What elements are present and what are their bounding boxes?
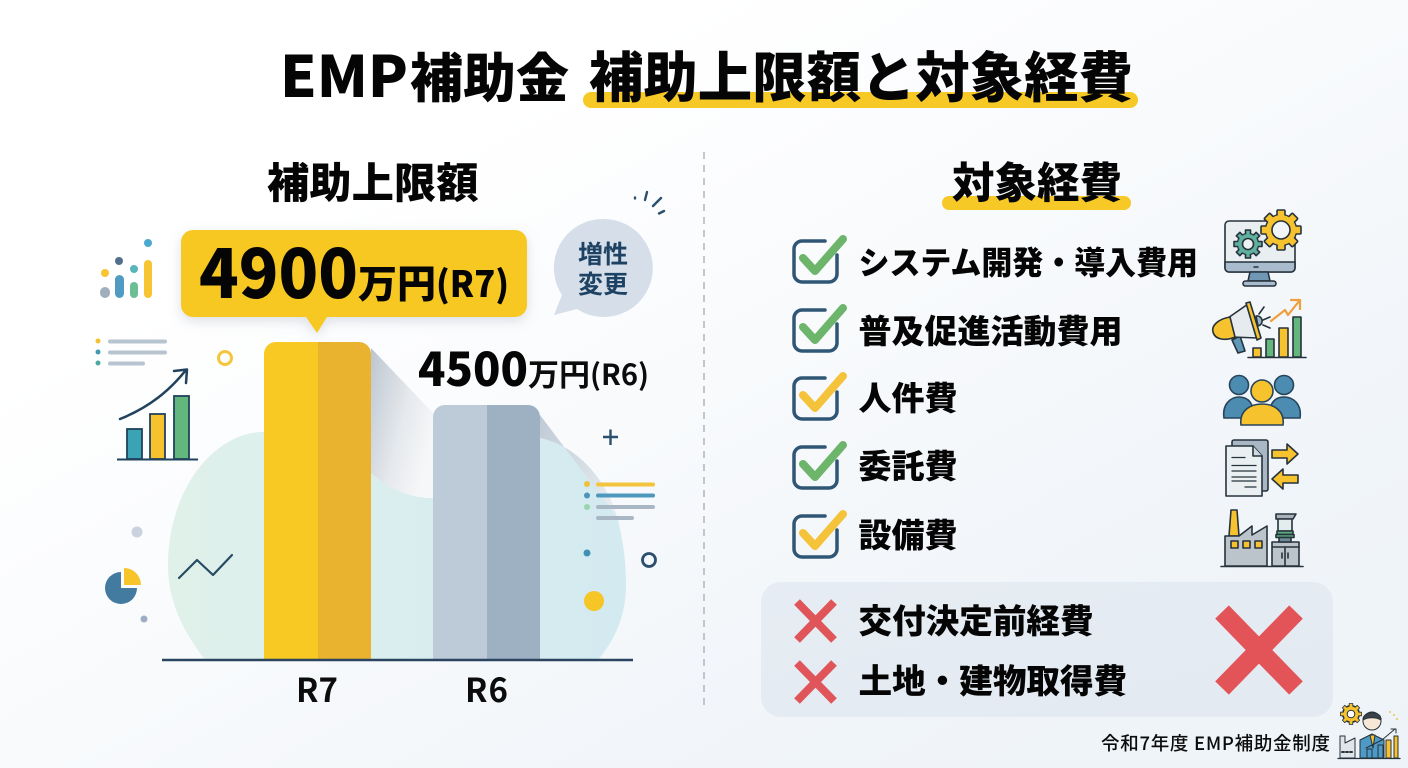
title text: EMP (280, 32, 408, 114)
bar: R7 (264, 342, 371, 660)
text: pre-decision costs: 交付決定前経費 (858, 594, 1094, 643)
label: R6 amount: 4500 (418, 333, 528, 400)
footer caption: 令和7年度 EMP補助金制度 (1101, 730, 1330, 756)
item: outsourcing (794, 440, 958, 488)
sparks (635, 192, 664, 214)
panel: subsidy cap (96, 150, 664, 712)
icon: pie chart (105, 568, 141, 604)
decorative icon: list left (96, 338, 165, 366)
callout: R7 amount: 万円 (358, 254, 436, 310)
icon: large cross (1222, 612, 1296, 688)
axis label: R6: R6 (465, 664, 508, 712)
callout: R7 amount: (R7) (436, 256, 509, 308)
background blob (168, 432, 626, 660)
callout bubble: change of nature (554, 219, 653, 317)
title text: 補助上限額と対象経費 (589, 34, 1133, 113)
axis label: R7: R7 (296, 664, 338, 712)
bar shadow: R6 (540, 415, 617, 517)
icon: megaphone with chart (1213, 300, 1306, 358)
callout: R7 amount: 4900 (199, 221, 358, 318)
item: personnel (794, 372, 958, 420)
decorative icon: dot bars (100, 239, 152, 298)
item: outsourcing: 委託費 (858, 440, 958, 488)
icon: zigzag line (179, 555, 232, 578)
label: R6 amount: 万円 (528, 350, 590, 395)
title highlight (583, 92, 1138, 108)
axis baseline (162, 659, 633, 661)
heading: eligible expenses: 対象経費 (952, 150, 1122, 211)
decorative ring (218, 352, 232, 364)
title text: 補助金 (410, 37, 569, 113)
decorative ring (642, 554, 656, 566)
plus mark (603, 430, 618, 445)
decorative icon: list right (584, 481, 653, 521)
heading: subsidy cap: 補助上限額 (267, 150, 478, 211)
panel: ineligible expenses (761, 582, 1333, 717)
icon: documents and arrows (1226, 440, 1298, 496)
decorative dot (140, 616, 148, 622)
icon: people (1224, 376, 1300, 425)
item: personnel: 人件費 (858, 372, 958, 420)
icon: footer businessperson (1338, 704, 1400, 758)
bar: R6 (433, 405, 540, 660)
decorative dot (132, 526, 142, 538)
icon: factory and machine (1221, 510, 1303, 566)
item: equipment (794, 509, 958, 557)
item: equipment: 設備費 (858, 509, 958, 557)
decorative yellow dot (584, 591, 604, 611)
divider (703, 152, 705, 708)
decorative dot (584, 550, 590, 556)
title (280, 32, 1138, 114)
panel: eligible expenses (761, 150, 1400, 758)
label: R6 amount (418, 333, 649, 400)
callout: R7 amount (181, 221, 527, 333)
callout bubble: change of nature: 変更 (578, 265, 628, 301)
text: land and building: 土地・建物取得費 (858, 654, 1127, 703)
icon: growth chart (117, 370, 198, 460)
item: system development: システム開発・導入費用 (858, 238, 1198, 284)
icon: cross 2 (797, 663, 834, 701)
heading underline (942, 196, 1131, 210)
callout bubble: change of nature: 増性 (578, 235, 628, 271)
label: R6 amount: (R6) (590, 352, 649, 394)
icon: cross 1 (797, 602, 834, 640)
item: promotion: 普及促進活動費用 (858, 305, 1122, 353)
bar shadow: R7 (371, 348, 433, 498)
icon: monitor and gears (1225, 210, 1301, 286)
